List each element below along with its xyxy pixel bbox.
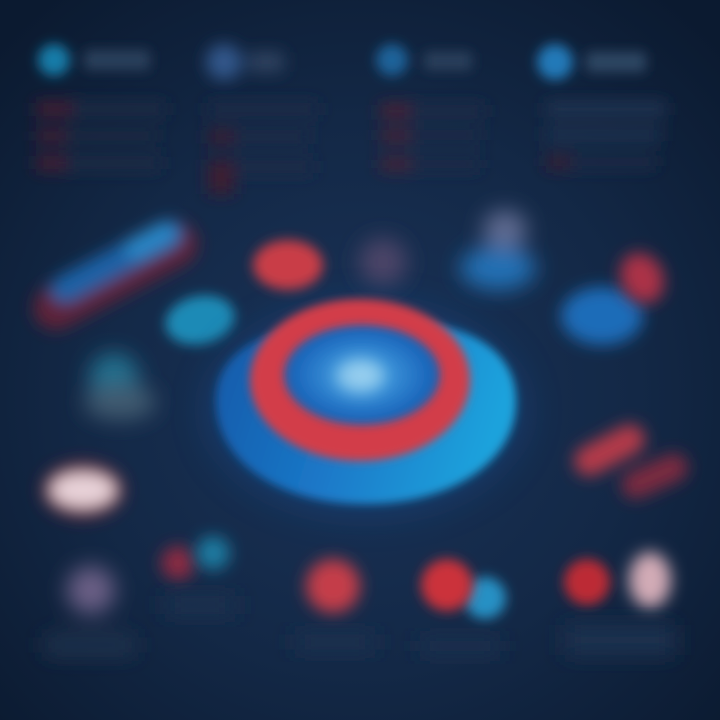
icon: diagonal capsule <box>24 211 205 338</box>
bottom icon 2 <box>161 536 235 615</box>
column 3 header <box>376 44 472 76</box>
icon: muted purple circle <box>359 238 407 286</box>
column 2 text <box>208 102 318 194</box>
icon: blue ellipse with red oval <box>561 246 672 345</box>
bottom icon 4 <box>420 559 506 654</box>
icon: white-red oval <box>41 461 125 519</box>
outer glow <box>206 305 526 515</box>
icon: red capsules <box>569 419 692 503</box>
column 1 header <box>38 44 150 76</box>
column 2 header <box>206 44 284 80</box>
outer blue disc <box>216 320 516 504</box>
bottom icon 5 <box>564 552 675 655</box>
column 4 header <box>537 44 646 80</box>
icon: cyan oval <box>161 289 239 351</box>
icon: blue cone <box>460 210 536 290</box>
panel: top info columns <box>36 44 666 194</box>
column 1 text <box>36 102 166 170</box>
bottom icon 1 <box>45 566 135 654</box>
panel: bottom icons row <box>45 536 675 655</box>
red ring <box>250 299 470 461</box>
column 4 text <box>546 102 666 168</box>
bottom icon 3 <box>295 559 375 651</box>
column 3 text <box>380 104 485 170</box>
icon: red oval <box>253 240 323 290</box>
chart: central concentric rings <box>206 299 526 515</box>
icon: teal dome <box>84 353 156 420</box>
core highlight <box>336 359 384 393</box>
inner blue disc <box>284 325 440 425</box>
